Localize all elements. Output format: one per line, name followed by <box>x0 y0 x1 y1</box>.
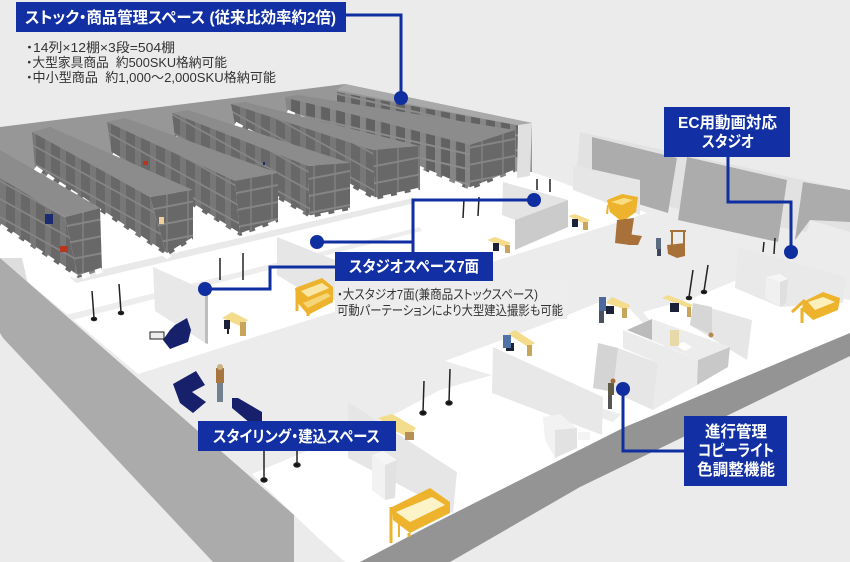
partition: centre right <box>690 303 752 360</box>
studio floor: lower zone <box>252 375 625 562</box>
printer <box>543 414 590 458</box>
notes: stock space <box>26 40 276 85</box>
back right wall <box>575 132 850 240</box>
shelf row back wall <box>337 84 532 178</box>
left wall <box>0 258 294 562</box>
connector: EC studio <box>728 156 798 259</box>
wall panel 3 <box>795 182 850 240</box>
label: progress management: コピーライト <box>698 442 774 460</box>
label: EC studio: EC用動画対応 <box>678 114 777 132</box>
label: stock space: ストック・商品管理スペース (従来比効率約2倍) <box>25 8 336 27</box>
wall panel 2 <box>678 157 787 242</box>
studio floor: strip along front wall <box>595 300 850 440</box>
connector: studio back <box>413 193 541 252</box>
partition: long centre <box>492 347 603 435</box>
connector: studio left <box>198 267 336 296</box>
notes: studio space: ・大スタジオ7面(兼商品ストックスペース) <box>337 287 538 302</box>
label: progress management <box>684 416 787 486</box>
connector: studio middle <box>310 235 413 249</box>
label: studio space: スタジオスペース7面 <box>349 258 479 276</box>
shelf row 2 <box>32 127 193 256</box>
shelf row 3 <box>107 118 278 236</box>
wardrobe: right studio <box>765 274 788 307</box>
bed: middle <box>295 278 333 316</box>
studio floor: back zone <box>0 165 647 374</box>
shelf row 1 <box>0 150 102 278</box>
partition: middle studio <box>277 237 335 300</box>
connector lines and markers <box>198 15 798 451</box>
label: styling space <box>198 421 396 451</box>
front wall <box>360 333 850 562</box>
bed: front <box>391 488 450 543</box>
notes: stock space: ・中小型商品 約1,000～2,000SKU格納可能 <box>26 70 276 85</box>
label: progress management: 進行管理 <box>705 422 767 441</box>
cabinet: top left corner <box>0 258 28 284</box>
bed: back <box>607 194 638 222</box>
bed: right <box>792 292 840 323</box>
label: styling space: スタイリング・建込スペース <box>213 427 380 446</box>
wooden furniture right <box>667 230 686 258</box>
desks <box>222 214 693 440</box>
notes: studio space: 可動パーテーションにより大型建込撮影も可能 <box>337 303 563 318</box>
floor strip lower <box>66 227 422 320</box>
light stands <box>92 179 775 482</box>
label: EC studio: スタジオ <box>702 133 754 151</box>
partition: right studio <box>735 247 846 307</box>
back studio wall <box>573 165 640 215</box>
partitions <box>0 182 846 513</box>
shelf row 5 <box>231 102 420 200</box>
right back partition <box>802 220 850 268</box>
back wall and shelf zone <box>0 84 532 210</box>
notes: stock space: ・大型家具商品 約500SKU格納可能 <box>26 55 227 70</box>
studio floor: right zone <box>643 280 850 385</box>
partition: left studio <box>153 267 207 344</box>
people <box>216 238 714 409</box>
label: studio space <box>335 252 493 281</box>
label: progress management: 色調整機能 <box>697 460 775 479</box>
outer walls <box>0 258 850 562</box>
floor strip upper <box>70 198 415 283</box>
shelf row 4 <box>172 110 350 218</box>
shelf row 6 <box>285 95 515 190</box>
partition: back studio <box>502 182 568 250</box>
shelf goods <box>45 161 265 252</box>
notes: studio space <box>335 281 567 319</box>
storage shelves <box>0 84 532 278</box>
wardrobe: lower left <box>372 451 397 500</box>
sofas <box>150 318 262 423</box>
notes: stock space: ・14列×12棚×3段=504棚 <box>26 40 175 55</box>
wall panel 1 <box>592 137 677 213</box>
wooden furniture back <box>615 218 642 245</box>
main floor <box>0 172 850 562</box>
label: EC studio <box>664 107 790 157</box>
label: stock space <box>16 2 346 32</box>
connector: progress <box>616 382 684 451</box>
connector: stock space <box>346 15 408 105</box>
partition edge <box>205 291 208 344</box>
furniture and people <box>92 179 840 543</box>
studio floor: centre zone <box>445 302 700 420</box>
booth <box>593 319 730 410</box>
partition: lower left <box>348 402 457 513</box>
